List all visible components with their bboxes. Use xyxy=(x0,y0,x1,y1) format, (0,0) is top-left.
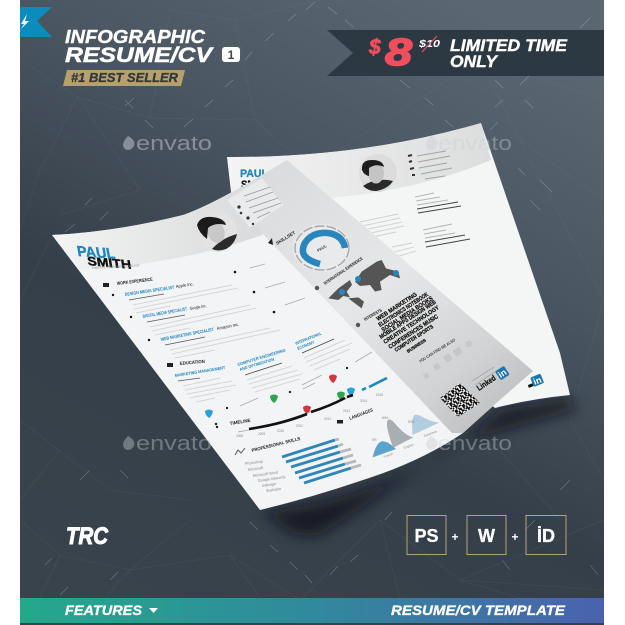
skills donut chart xyxy=(268,224,351,272)
back sheet name: PAUL xyxy=(240,168,268,180)
degree one: MARKETING MANAGEMENT xyxy=(174,365,226,378)
sheet shadow xyxy=(262,398,575,535)
word cloud text: CREATIVE TECHNOLOGY xyxy=(383,305,441,346)
work experience section xyxy=(103,264,305,358)
QR code xyxy=(440,383,480,417)
price ribbon: $10 xyxy=(418,39,441,50)
timeline chart: 2008 xyxy=(236,434,243,438)
word cloud text: WEB MARKETING xyxy=(376,292,419,323)
timeline chart: 2011 xyxy=(296,424,303,428)
bottom gradient bar: FEATURES xyxy=(65,602,143,618)
back sheet name: SMITH xyxy=(241,179,271,191)
candidate name: PAUL xyxy=(76,244,117,263)
back sheet contact details xyxy=(408,151,452,179)
word cloud text: ELECTRONICS NOTEBOOK xyxy=(378,292,430,329)
skill labels: Microsoft xyxy=(248,466,264,472)
envato watermark top right xyxy=(426,133,512,155)
skills donut chart: SKILLSET xyxy=(275,230,296,246)
international experience map: INTERNATIONAL EXPERIENCE xyxy=(323,256,364,286)
timeline chart: 2013 xyxy=(343,409,350,413)
languages chart: Japanese xyxy=(423,429,438,438)
ID box: İD xyxy=(537,526,555,546)
back sheet linkedin icon: in xyxy=(532,375,543,387)
degree three: INTERNATIONAL xyxy=(295,331,323,346)
W box: W xyxy=(478,526,495,546)
title block: INFOGRAPHIC xyxy=(65,27,206,47)
timeline chart: 2015 xyxy=(376,393,383,397)
skills donut chart: PAUL xyxy=(316,243,328,253)
price ribbon: ONLY xyxy=(450,53,499,71)
languages chart xyxy=(337,407,439,459)
skill labels: Illustrator xyxy=(266,487,282,493)
back sheet name xyxy=(240,168,271,191)
job entry three: WEB MARKETING SPECIALIST xyxy=(160,327,214,342)
education section xyxy=(167,331,352,402)
word cloud text: MOBILE APPS DESIGN WEB xyxy=(379,299,438,341)
job entry three xyxy=(148,298,305,358)
W box xyxy=(467,516,506,554)
envato watermark bottom right xyxy=(426,433,512,455)
contact block xyxy=(227,178,283,228)
PS box xyxy=(407,516,446,554)
best seller tag: #1 BEST SELLER xyxy=(71,70,179,85)
timeline chart: 2010 xyxy=(277,429,284,433)
envato watermark bottom left: envato xyxy=(136,433,212,455)
back resume sheet xyxy=(227,123,570,408)
portrait xyxy=(197,212,237,252)
languages chart: 80% xyxy=(382,416,389,420)
PS box: PS xyxy=(414,526,439,546)
back sheet reference text xyxy=(360,193,470,257)
TRC logo: TRC xyxy=(66,523,109,550)
word cloud text: BUSINESS xyxy=(406,338,427,354)
envato watermark bottom right: envato xyxy=(438,433,512,455)
job entry one xyxy=(112,264,265,313)
timeline markers xyxy=(205,352,372,418)
language peaks xyxy=(373,415,439,457)
timeline chart xyxy=(215,378,387,438)
price ribbon: LIMITED TIME xyxy=(450,37,568,55)
languages chart: 50% xyxy=(408,420,415,424)
timeline chart: 2009 xyxy=(258,432,265,436)
envato watermark top left: envato xyxy=(136,133,212,155)
find me also social icons: YOU CAN FIND ME ALSO xyxy=(418,337,457,364)
header band xyxy=(52,160,287,270)
linkedin badge: Linked xyxy=(475,373,498,393)
skill labels xyxy=(245,460,286,493)
languages chart: French xyxy=(383,452,394,459)
skill labels: Indesign xyxy=(262,482,276,488)
word cloud text: SOCIAL MEDIA BOOKS xyxy=(381,296,434,334)
job entry two xyxy=(130,282,285,335)
languages chart: 5% xyxy=(372,438,377,442)
degree three: ECONOMY xyxy=(297,339,315,351)
envato watermark bottom left xyxy=(123,433,212,455)
education section: EDUCATION xyxy=(180,359,206,366)
languages chart: English xyxy=(403,443,414,450)
professional skills chart xyxy=(235,436,361,493)
word cloud text: CONFERENCES MUSIC xyxy=(388,314,440,351)
skill labels: Microsoft Word xyxy=(253,470,278,478)
envato watermark top left xyxy=(123,133,212,155)
price ribbon: $ xyxy=(368,36,381,59)
degree two: AND OPTIMIZATION xyxy=(239,357,275,372)
title block xyxy=(65,27,240,67)
bottom gradient bar: RESUME/CV TEMPLATE xyxy=(391,602,566,618)
ID box xyxy=(526,516,566,554)
job entry two: Google Inc. xyxy=(189,303,207,311)
professional skills chart: PROFESSIONAL SKILLS xyxy=(251,436,301,453)
job entry two: DIGITAL MEDIA SPECIALIST xyxy=(142,306,188,319)
back sheet header band xyxy=(227,123,491,200)
front resume sheet xyxy=(52,160,533,510)
work experience section: WORK EXPERIENCE xyxy=(117,277,153,286)
world map shapes xyxy=(328,260,400,308)
skill bars xyxy=(282,439,361,483)
software format boxes xyxy=(407,516,566,554)
software format boxes: + xyxy=(511,530,519,544)
international experience map xyxy=(315,256,400,308)
interests word cloud xyxy=(356,292,441,354)
job entry one: DESIGN MEDIA SPECIALIST xyxy=(124,285,175,297)
timeline chart: 2012 xyxy=(324,417,331,421)
timeline chart: 2014 xyxy=(360,399,367,403)
back sheet portrait xyxy=(359,154,397,192)
candidate name xyxy=(76,244,140,272)
find me also social icons xyxy=(418,337,472,379)
title block: 1 xyxy=(228,48,235,62)
skill labels: Google Adwords xyxy=(258,475,286,483)
candidate name: SMITH xyxy=(86,254,132,272)
skill labels: Photoshop xyxy=(245,460,263,466)
degree two: COMPUTER ENGINEERING xyxy=(237,348,286,367)
languages chart: LANGUAGES xyxy=(349,407,374,421)
envato watermark top right: envato xyxy=(438,133,512,155)
word cloud text: COMPUTER SPORTS xyxy=(394,324,435,354)
degree one xyxy=(174,365,236,402)
timeline chart: TIMELINE xyxy=(229,418,251,426)
job entry three: Amazon Inc. xyxy=(216,322,240,331)
map location pins xyxy=(339,270,399,295)
word cloud text xyxy=(376,292,441,354)
degree three xyxy=(295,331,352,370)
price ribbon: 8 xyxy=(385,32,413,74)
bottom gradient bar xyxy=(20,598,604,623)
price ribbon xyxy=(327,30,604,76)
job entry one: Apple Inc. xyxy=(175,281,194,289)
linkedin badge: in xyxy=(496,367,508,380)
candidate name: DIGITAL MEDIA SPECIALIST xyxy=(92,263,140,270)
interests word cloud: INTERESTS xyxy=(363,308,383,322)
sidebar panel xyxy=(225,160,533,433)
degree two xyxy=(237,348,302,392)
back sheet linkedin icon xyxy=(526,374,544,389)
title block: RESUME/CV xyxy=(65,44,214,67)
software format boxes: + xyxy=(451,530,459,544)
linkedin badge xyxy=(472,366,510,393)
ribbon badge with lightning icon xyxy=(20,7,52,37)
